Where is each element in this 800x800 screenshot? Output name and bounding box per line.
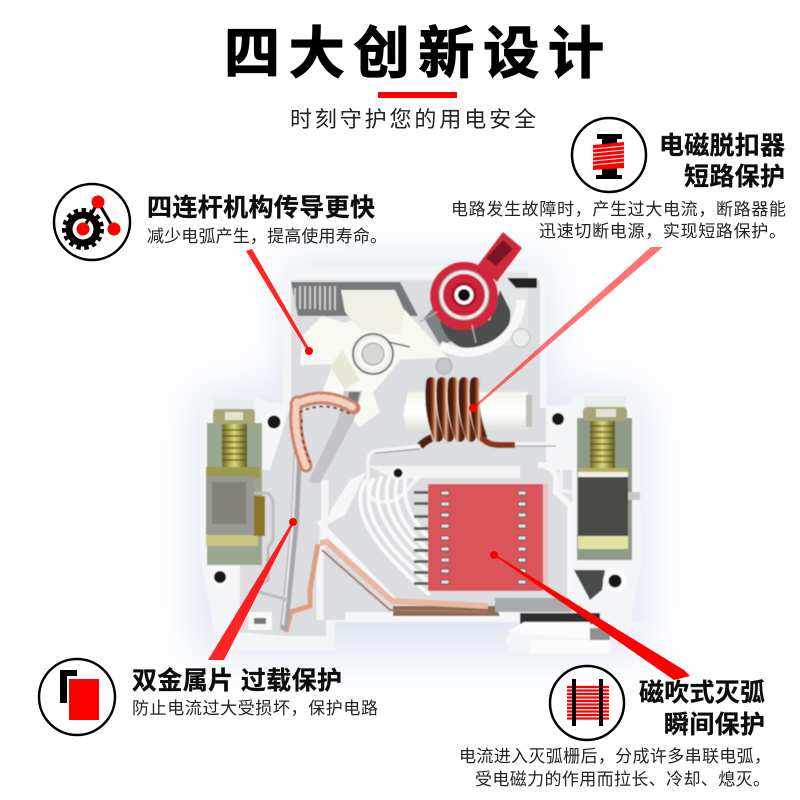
red toggle knob bbox=[420, 232, 522, 343]
pointer: bimetal bbox=[208, 518, 297, 660]
screw boss bbox=[512, 329, 530, 347]
main pivot spring bbox=[353, 334, 410, 374]
left terminal bbox=[206, 399, 288, 630]
heading: 四连杆机构传导更快 bbox=[147, 194, 375, 222]
icon: coil bbox=[572, 118, 646, 192]
description: 防止电流过大受损坏，保护电路 bbox=[132, 699, 378, 718]
arc chute white fins bbox=[360, 476, 436, 595]
description: 电流进入灭弧栅后，分成许多串联电弧， bbox=[459, 747, 771, 766]
panel: four-bar linkage bbox=[54, 184, 387, 260]
pointer: coil bbox=[469, 247, 663, 412]
description: 迅速切断电源，实现短路保护。 bbox=[539, 222, 786, 241]
screw hole right bbox=[548, 409, 568, 429]
description bbox=[459, 747, 771, 789]
silver coil wire bbox=[368, 444, 580, 502]
bottom channel bbox=[393, 606, 500, 616]
breaker photo illustration bbox=[200, 232, 650, 653]
icon: arc grid bbox=[550, 666, 624, 740]
panel: electromagnetic trip bbox=[451, 118, 786, 241]
description bbox=[451, 200, 786, 241]
heading: 磁吹式灭弧 bbox=[639, 679, 765, 707]
subheading: 短路保护 bbox=[684, 163, 785, 191]
right wall bbox=[538, 465, 590, 615]
bobbin bbox=[403, 392, 528, 434]
panel: magnetic arc extinguishing bbox=[459, 666, 771, 789]
copper braid bbox=[296, 398, 354, 466]
copper bimetal strip bbox=[320, 542, 488, 606]
pointer lines bbox=[208, 247, 690, 680]
white arc around knob bbox=[470, 272, 528, 345]
title: 四大创新设计 bbox=[224, 22, 604, 85]
description: 电路发生故障时，产生过大电流，断路器能 bbox=[451, 200, 786, 219]
silver moving contact bbox=[308, 391, 362, 483]
right terminal bbox=[574, 396, 640, 600]
interior cavity bbox=[240, 280, 572, 636]
description: 减少电弧产生，提高使用寿命。 bbox=[147, 226, 387, 246]
description: 受电磁力的作用而拉长、冷却、熄灭。 bbox=[475, 770, 770, 789]
springs bbox=[295, 286, 391, 318]
icon: gear and links bbox=[54, 184, 130, 260]
housing bbox=[200, 266, 650, 653]
din rail clip bbox=[520, 613, 600, 624]
red arc-chute plate bbox=[414, 484, 548, 591]
bimetal silver strip bbox=[284, 450, 298, 630]
panel: bimetal overload bbox=[39, 659, 378, 735]
pointer: linkage bbox=[246, 249, 313, 355]
subheading: 瞬间保护 bbox=[664, 711, 765, 739]
heading: 双金属片 过载保护 bbox=[132, 667, 342, 695]
icon: bimetal sheets bbox=[39, 659, 115, 735]
subtitle: 时刻守护您的用电安全 bbox=[290, 107, 536, 132]
copper coil bbox=[430, 382, 482, 437]
heading: 电磁脱扣器 bbox=[659, 132, 785, 160]
background glow bbox=[195, 262, 645, 655]
upper dark mechanism well bbox=[291, 282, 418, 316]
pointer: arc chute bbox=[490, 551, 690, 680]
white mechanism linkage bbox=[300, 310, 447, 427]
title underline bbox=[378, 92, 457, 98]
